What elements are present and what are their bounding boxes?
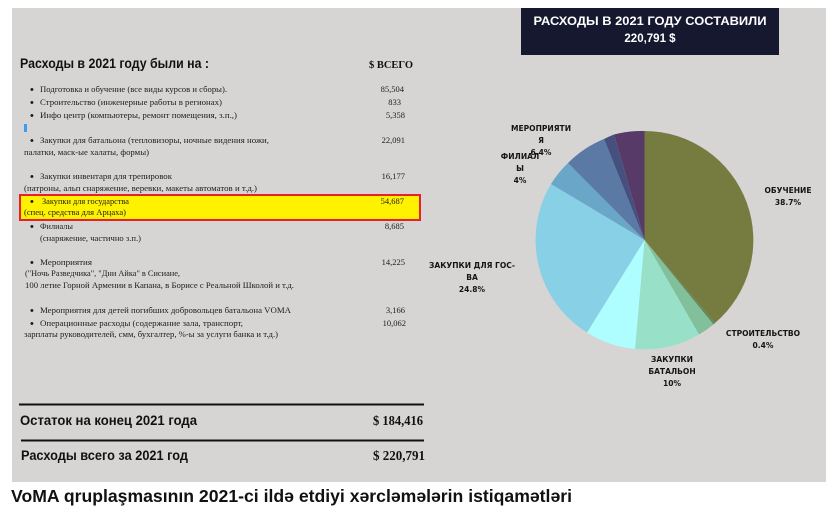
total: expenses: $ 220,791 <box>373 449 425 464</box>
pie label: state purchases: 24.8% <box>459 285 486 294</box>
header box: total expenses: 220,791 $ <box>624 33 676 45</box>
pie label: branches: 4% <box>514 176 527 185</box>
row: branches <box>30 221 404 243</box>
row: events for children: • <box>30 305 34 317</box>
row: events: Мероприятия <box>40 257 92 267</box>
pie label: branches: Ы <box>516 164 524 173</box>
slice: construction <box>644 240 715 324</box>
row: info center: • <box>30 110 34 122</box>
row: training inventory: 16,177 <box>382 171 405 181</box>
row: training: Подготовка и обучение (все виды курсов и сборы). <box>40 84 227 94</box>
row: branches: 8,685 <box>385 221 404 231</box>
pie label: battalion purchases: БАТАЛЬОН <box>648 367 696 376</box>
row: construction: Строительство (инженерные работы в регионах) <box>40 97 222 107</box>
slice: operating costs <box>614 131 644 240</box>
row: battalion purchases: палатки, маск-ые халаты, формы) <box>24 147 149 157</box>
row: branches: Филиалы <box>40 221 73 231</box>
highlight box: state purchases <box>20 195 420 220</box>
slice: children events <box>604 134 644 240</box>
row: info center <box>30 110 405 122</box>
slice: training <box>644 131 753 323</box>
header box: total expenses <box>521 8 779 55</box>
row: events for children <box>30 305 405 317</box>
row: operating costs: 10,062 <box>383 318 406 328</box>
slice: state purchases <box>536 184 644 332</box>
row: battalion purchases: • <box>30 135 34 147</box>
pie chart <box>536 131 753 349</box>
row: construction: 833 <box>388 97 401 107</box>
pie label: events: 6.4% <box>531 148 552 157</box>
row: state purchases: Закупки для государства <box>42 196 129 206</box>
row: events: 100 летие Горной Армении в Капана, в Борисе с Реальной Школой и т.д. <box>25 280 294 290</box>
slice: events <box>568 139 644 240</box>
slice: battalion purchases <box>635 240 699 349</box>
row: training <box>30 84 405 96</box>
row: events: ("Ночь Разведчика", "Дни Айка" в Сисиане, <box>25 268 180 278</box>
row: operating costs: • <box>30 318 34 330</box>
pie label: battalion purchases: ЗАКУПКИ <box>651 355 693 364</box>
header box: total expenses: РАСХОДЫ В 2021 ГОДУ СОСТАВИЛИ <box>534 16 766 28</box>
pie label: construction: 0.4% <box>753 341 774 350</box>
totals <box>19 404 425 464</box>
blue marker <box>24 124 27 132</box>
row: info center: 5,358 <box>386 110 405 120</box>
total: expenses <box>21 448 425 464</box>
slice: info center <box>644 240 714 334</box>
row: state purchases: 54,687 <box>381 196 404 206</box>
total: balance <box>20 413 423 429</box>
row: training inventory: (патроны, альп снаряжение, веревки, макеты автоматов и т.д.) <box>24 183 257 193</box>
row: battalion purchases: Закупки для батальона (тепловизоры, ночные видения ножи, <box>40 135 269 145</box>
pie label: events: МЕРОПРИЯТИ <box>511 124 571 133</box>
row: operating costs: Операционные расходы (содержание зала, транспорт, <box>40 318 243 328</box>
row: events for children: 3,166 <box>386 305 405 315</box>
row: branches: (снаряжение, частично з.п.) <box>40 233 141 243</box>
row: events: 14,225 <box>382 257 405 267</box>
row: construction <box>30 97 401 109</box>
pie label: construction: СТРОИТЕЛЬСТВО <box>726 329 801 338</box>
row: events: • <box>30 257 34 269</box>
pie label: battalion purchases: 10% <box>663 379 681 388</box>
row: branches: • <box>30 221 34 233</box>
row: info center: Инфо центр (компьютеры, ремонт помещения, з.п.,) <box>40 110 237 120</box>
row: battalion purchases <box>24 135 405 157</box>
pie label: training: ОБУЧЕНИЕ <box>764 186 812 195</box>
caption: VoMA qruplaşmasının 2021-ci ildə etdiyi xərcləmələrin istiqamətləri <box>11 486 572 506</box>
row: events for children: Мероприятия для детей погибших добровольцев батальона VOMA <box>40 305 292 315</box>
total: balance: Остаток на конец 2021 года <box>20 413 197 428</box>
slice: inventory <box>587 240 644 349</box>
row: training inventory <box>24 171 405 193</box>
row: state purchases: (спец. средства для Арцаха) <box>24 207 126 217</box>
row: operating costs <box>24 318 406 339</box>
row: state purchases <box>24 196 404 217</box>
expense list <box>24 84 406 339</box>
table heading: Расходы в 2021 году были на : <box>20 56 209 71</box>
pie label: training: 38.7% <box>775 198 802 207</box>
slice: branches <box>551 163 644 240</box>
row: training inventory: • <box>30 171 34 183</box>
row: state purchases: • <box>30 196 34 208</box>
pie label: state purchases: ЗАКУПКИ ДЛЯ ГОС- <box>429 261 515 270</box>
total: expenses: Расходы всего за 2021 год <box>21 448 188 463</box>
row: training: 85,504 <box>381 84 405 94</box>
row: events <box>25 257 405 290</box>
pie label: events: Я <box>538 136 544 145</box>
pie label: branches: ФИЛИАЛ <box>501 152 539 161</box>
row: battalion purchases: 22,091 <box>382 135 405 145</box>
row: construction: • <box>30 97 34 109</box>
row: training inventory: Закупки инвентаря для трепировок <box>40 171 173 181</box>
row: operating costs: зарплаты руководителей, смм, бухгалтер, %-ы за услуги банка и т.д.) <box>24 329 278 339</box>
pie label: state purchases: ВА <box>466 273 478 282</box>
total: balance: $ 184,416 <box>373 414 423 429</box>
column heading: $ ВСЕГО <box>369 60 413 71</box>
row: training: • <box>30 84 34 96</box>
